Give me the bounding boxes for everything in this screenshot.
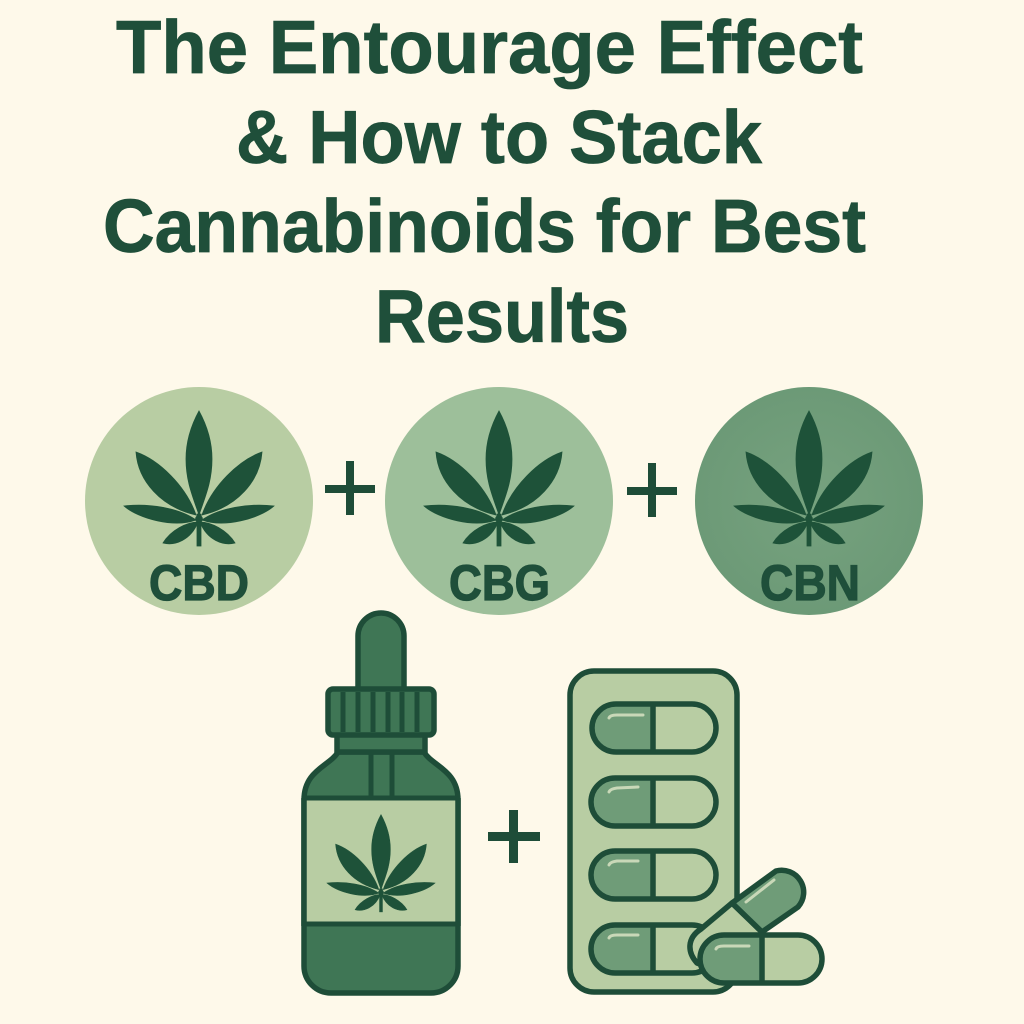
dropper bottle [304, 613, 458, 993]
loose capsule tilted [690, 870, 804, 975]
dropper tube [371, 752, 392, 798]
plus sign between bottle and pills [488, 810, 540, 863]
CBG circle [385, 387, 613, 615]
cap ribs [343, 692, 417, 732]
blister capsule 3 [591, 851, 716, 899]
CBD circle: CBD [149, 555, 249, 611]
title: & How to Stack [236, 95, 762, 179]
plus sign between CBD and CBG [325, 461, 375, 515]
bottle body [304, 752, 458, 993]
CBN circle [695, 387, 923, 615]
plus sign between CBG and CBN [627, 463, 677, 517]
bottle label [304, 798, 458, 926]
CBN circle: CBN [760, 555, 860, 611]
CBD circle [85, 387, 313, 615]
loose capsule horizontal [700, 935, 822, 983]
blister capsule 4 [591, 925, 716, 973]
blister capsule 2 [591, 778, 716, 826]
title [103, 5, 866, 358]
blister card [570, 671, 737, 992]
title: Cannabinoids for Best [103, 184, 866, 268]
CBG circle: CBG [449, 555, 550, 611]
bottle neck [337, 734, 425, 752]
bottle cap [328, 689, 434, 735]
title: Results [375, 274, 629, 358]
bottle dropper bulb [358, 613, 404, 690]
blister capsule 1 [592, 704, 716, 752]
title: The Entourage Effect [116, 5, 863, 89]
blister pack [570, 671, 737, 992]
